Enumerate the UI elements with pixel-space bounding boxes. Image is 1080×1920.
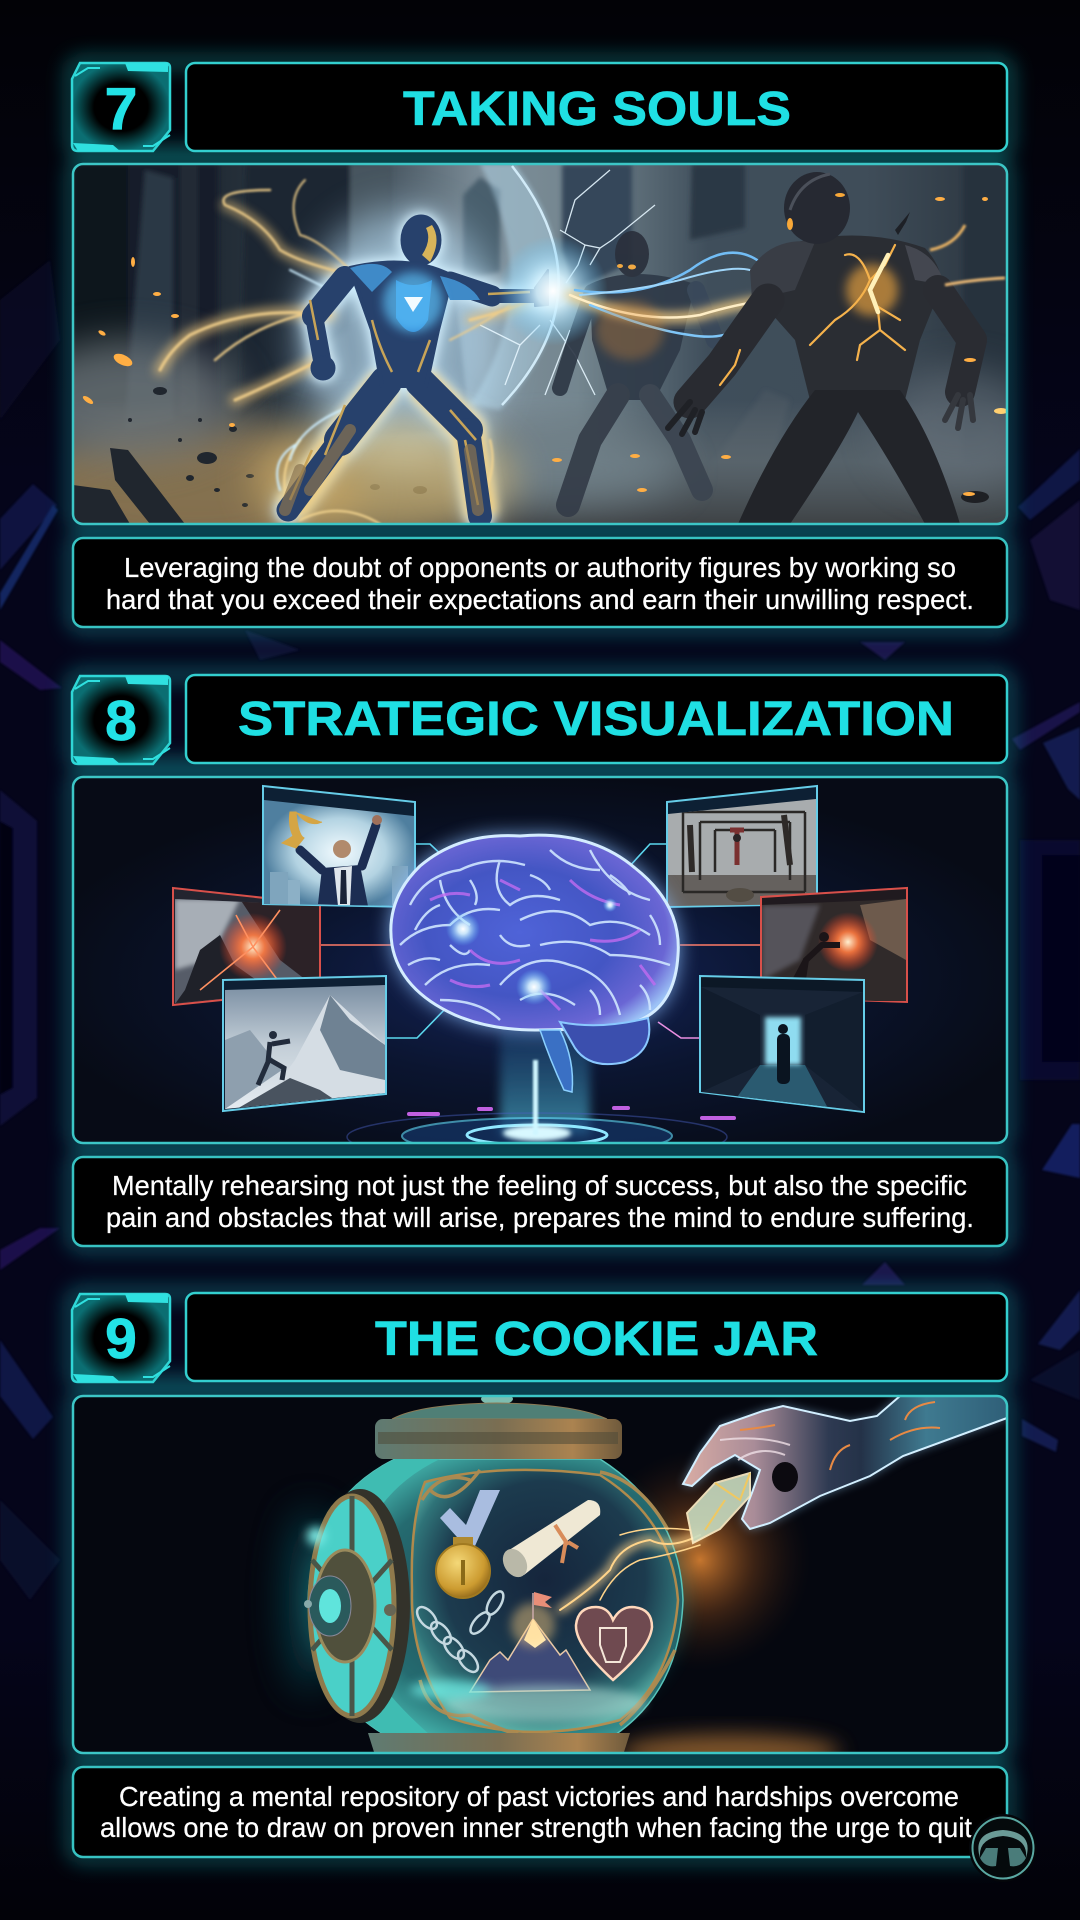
- screen: mountain climb: [223, 976, 386, 1111]
- golem mid: [560, 231, 715, 505]
- base: [368, 1733, 630, 1752]
- energy beams: [570, 253, 780, 360]
- broken chain: [413, 1589, 507, 1675]
- screen: red storm right: [761, 888, 907, 1002]
- description 7: Leveraging the doubt of opponents or authority figures by working so: [124, 552, 956, 583]
- corner logo emblem: [969, 1814, 1037, 1882]
- vault door: [344, 1489, 410, 1723]
- jar window: [412, 1470, 678, 1732]
- section 9: the cookie jar: [72, 1293, 1007, 1857]
- glittering jar floor: [445, 1685, 645, 1721]
- description 7: [73, 538, 1007, 627]
- scroll: [498, 1500, 600, 1581]
- number badge 8: 8: [105, 689, 137, 753]
- number badge 7: 7: [105, 76, 137, 142]
- title bar: taking souls: [186, 63, 1007, 151]
- hero halo: [300, 210, 500, 470]
- panel border 7: [73, 164, 1007, 524]
- illustration: glowing jar with hand placing a crystal: [73, 1393, 1007, 1770]
- section 7: taking souls: [20, 63, 1040, 627]
- heart with fist: [576, 1607, 652, 1680]
- number badge 9: [72, 1294, 170, 1382]
- shield: [470, 164, 655, 410]
- giant armored opponent: [668, 172, 1005, 524]
- rubble: [73, 387, 427, 524]
- screen: obstacle course: [667, 786, 818, 907]
- description 8: pain and obstacles that will arise, prepares the mind to endure suffering.: [106, 1202, 974, 1233]
- medal: [436, 1490, 500, 1598]
- panel border 8: [73, 777, 1007, 1143]
- mountain with flag: [470, 1592, 590, 1692]
- title bar: the cookie jar: THE COOKIE JAR: [375, 1313, 818, 1366]
- glowing brain: [391, 835, 678, 1092]
- title bar: strategic visualization: STRATEGIC VISUALIZATION: [238, 693, 954, 746]
- energy tendrils: [160, 180, 530, 524]
- hologram beam and platform: [346, 1030, 736, 1142]
- impact flash: [498, 236, 608, 346]
- description 8: [73, 1157, 1007, 1246]
- lid: [481, 1397, 513, 1403]
- description 9: [73, 1767, 1007, 1857]
- description 9: Creating a mental repository of past victories and hardships overcome: [119, 1781, 959, 1812]
- sparks: [82, 197, 1008, 496]
- number badge 7: [72, 63, 170, 151]
- connector lines: [320, 844, 762, 1038]
- illustration: hero breaking a shield against armored opponents: [74, 165, 1006, 523]
- screen: red storm left: [173, 888, 320, 1005]
- title bar: the cookie jar: [186, 1293, 1007, 1381]
- number badge 8: [72, 676, 170, 764]
- jar: [304, 1393, 700, 1752]
- screen: dark corridor: [700, 976, 864, 1113]
- lightning glow of the hero: [288, 215, 548, 516]
- section 8: strategic visualization: [72, 675, 1007, 1246]
- hero figure: [285, 215, 548, 516]
- description 9: allows one to draw on proven inner strength when facing the urge to quit: [100, 1812, 972, 1843]
- title bar: strategic visualization: [186, 675, 1007, 763]
- number badge 9: 9: [105, 1307, 137, 1371]
- illustration: brain with connected visualization screens: [73, 777, 1007, 1161]
- title bar: taking souls: TAKING SOULS: [403, 83, 791, 136]
- description 8: Mentally rehearsing not just the feeling of success, but also the specific: [112, 1170, 967, 1201]
- energy wisp: [560, 1528, 700, 1610]
- screen: trophy victory: [263, 786, 416, 908]
- description 7: hard that you exceed their expectations and earn their unwilling respect.: [106, 584, 974, 615]
- panel border 9: [73, 1396, 1007, 1753]
- translucent hand with crystal: [683, 1396, 1007, 1543]
